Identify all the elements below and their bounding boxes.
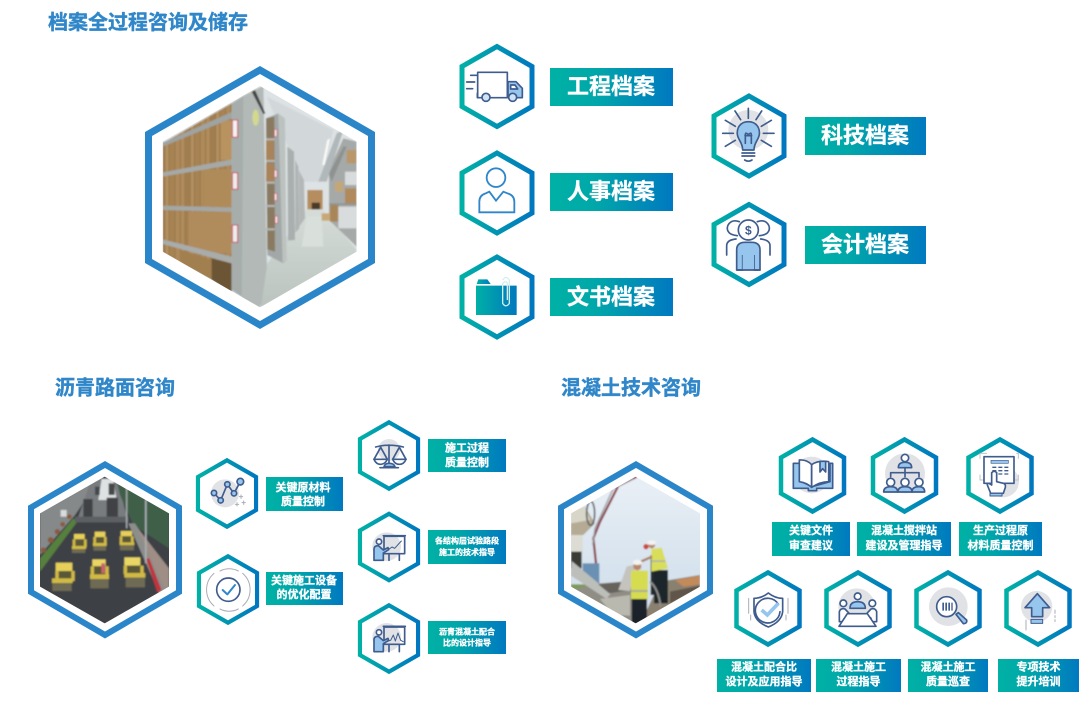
label: document review: 关键文件	[789, 523, 833, 537]
icon: magnifier hexagon	[916, 572, 980, 644]
label: document review: 审查建议	[789, 538, 833, 552]
label: mix ratio design: 设计及应用指导	[726, 674, 802, 688]
icon: keypad touch hexagon	[968, 440, 1032, 512]
label: construction guidance: 混凝土施工	[831, 660, 886, 674]
label: construction quality: 施工过程	[445, 440, 489, 454]
label: document archive: 文书档案	[567, 284, 655, 310]
photo hexagon: concrete workers	[561, 464, 710, 635]
icon: presenter growth hexagon	[360, 514, 418, 580]
label: quality inspection: 混凝土施工	[920, 660, 976, 674]
label: trial section guidance: 各结构层试验路段	[435, 536, 499, 546]
icon: finance people hexagon	[714, 204, 784, 284]
label: mixing station: 混凝土搅拌站	[871, 523, 937, 537]
label: engineering archive: 工程档案	[567, 74, 655, 99]
label: mixing station	[857, 522, 951, 556]
label: document archive	[550, 278, 673, 316]
icon: folder hexagon	[462, 257, 532, 337]
icon: truck hexagon	[462, 46, 532, 126]
photo hexagon: archive shelves	[148, 70, 372, 325]
label: document review	[772, 522, 850, 556]
icon: person hexagon	[462, 153, 532, 233]
label: equipment optimisation: 关键施工设备	[271, 573, 337, 587]
label: equipment optimisation: 的优化配置	[276, 587, 332, 601]
icon: finance people hexagon: $	[745, 223, 752, 237]
heading: asphalt consulting: 沥青路面咨询	[55, 376, 175, 400]
label: trial section guidance	[428, 530, 506, 564]
label: raw material quality: 关键原材料	[276, 480, 330, 494]
label: construction quality	[428, 439, 506, 472]
label: equipment optimisation	[266, 572, 343, 605]
label: accounting archive	[805, 226, 926, 264]
icon: upward arrow hexagon	[1006, 572, 1070, 644]
icon: material chart hexagon	[198, 460, 256, 527]
label: engineering archive	[550, 68, 673, 106]
label: construction guidance: 过程指导	[836, 674, 880, 688]
label: construction guidance	[816, 659, 901, 692]
icon: presenter report hexagon	[360, 605, 418, 672]
label: production materials	[959, 522, 1042, 556]
icon: meeting hexagon	[826, 572, 890, 644]
label: mix design guidance	[428, 621, 506, 654]
label: training	[998, 659, 1079, 692]
label: quality inspection	[908, 659, 988, 692]
label: training: 提升培训	[1016, 674, 1060, 688]
label: mix ratio design: 混凝土配合比	[731, 660, 797, 674]
icon: equipment check hexagon	[199, 556, 257, 623]
label: technology archive: 科技档案	[821, 123, 909, 148]
label: quality inspection: 质量巡查	[926, 674, 970, 688]
label: raw material quality: 质量控制	[281, 494, 325, 508]
label: accounting archive: 会计档案	[821, 232, 909, 257]
label: training: 专项技术	[1016, 660, 1060, 674]
icon: light bulb hexagon	[714, 96, 784, 176]
icon: open book hexagon	[781, 440, 844, 512]
label: construction quality: 质量控制	[445, 455, 489, 469]
title: archive consulting: 档案全过程咨询及储存	[48, 10, 248, 34]
heading: concrete consulting: 混凝土技术咨询	[561, 376, 701, 400]
label: personnel archive	[550, 173, 673, 211]
label: production materials: 材料质量控制	[968, 538, 1034, 552]
icon: shield check hexagon	[736, 572, 800, 644]
label: mix design guidance: 比的设计指导	[443, 638, 491, 648]
label: production materials: 生产过程原	[973, 523, 1028, 537]
icon: scales hexagon	[360, 422, 418, 489]
label: mixing station: 建设及管理指导	[866, 538, 942, 552]
label: trial section guidance: 施工的技术指导	[439, 547, 495, 557]
label: mix ratio design	[717, 659, 811, 692]
label: mix design guidance: 沥青混凝土配合	[439, 626, 495, 636]
label: technology archive	[805, 117, 926, 155]
label: personnel archive: 人事档案	[567, 179, 655, 204]
photo hexagon: road rollers	[31, 464, 179, 635]
icon: org chart hexagon	[873, 440, 936, 512]
label: raw material quality	[266, 477, 343, 511]
